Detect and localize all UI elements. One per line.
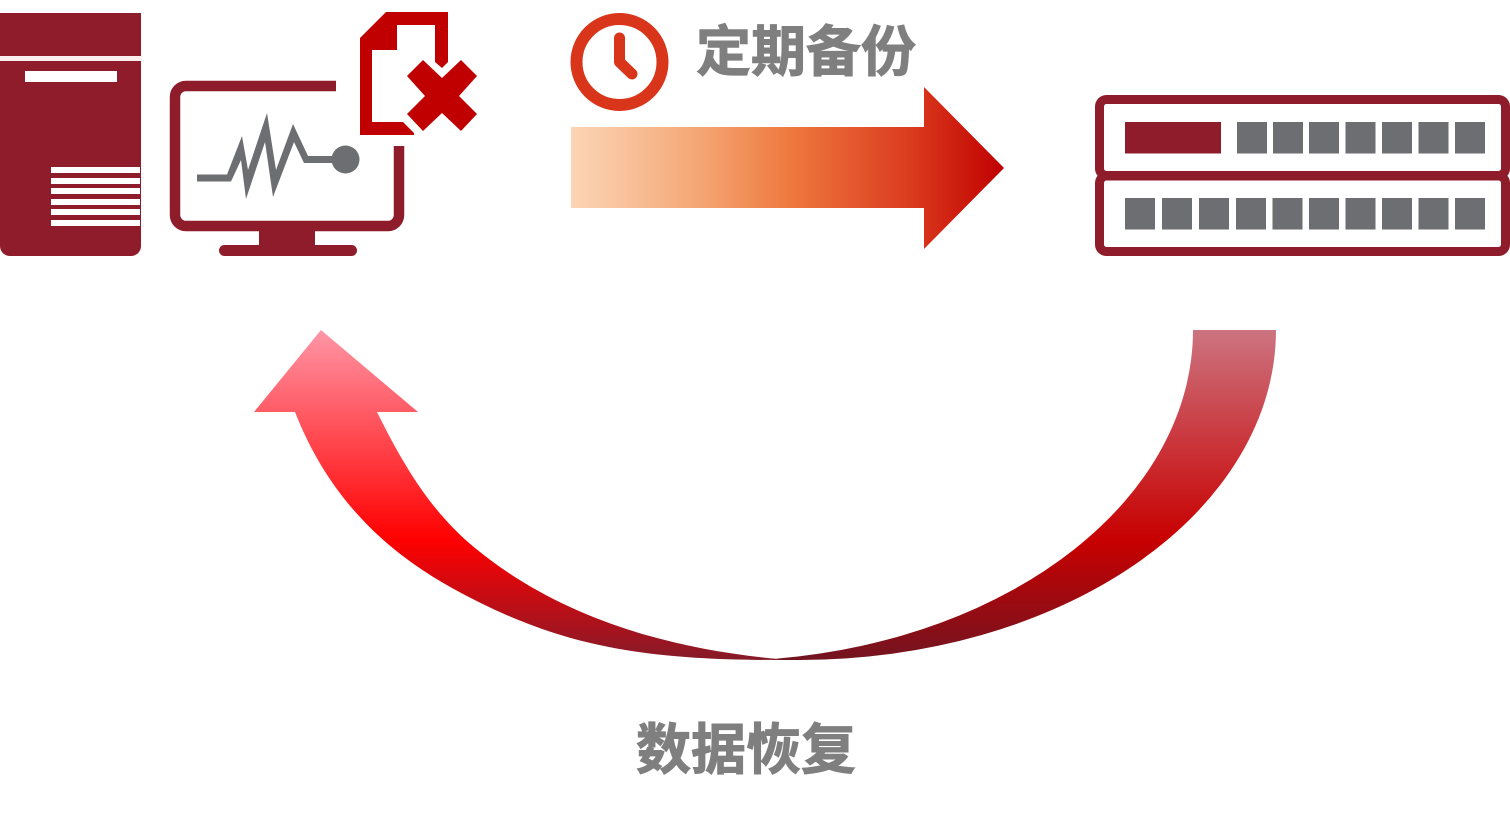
arrow: recovery, curved [254,330,1276,660]
icon: clock [576,19,662,105]
arrow: backup [571,87,1004,249]
icon: storage rack [1100,100,1506,252]
icon: monitor with pulse [175,86,399,256]
heading: scheduled backup: 定期备份 [696,21,916,83]
icon: damaged file [360,12,477,135]
icon: server tower [0,13,142,256]
heading: data recovery: 数据恢复 [636,719,856,781]
